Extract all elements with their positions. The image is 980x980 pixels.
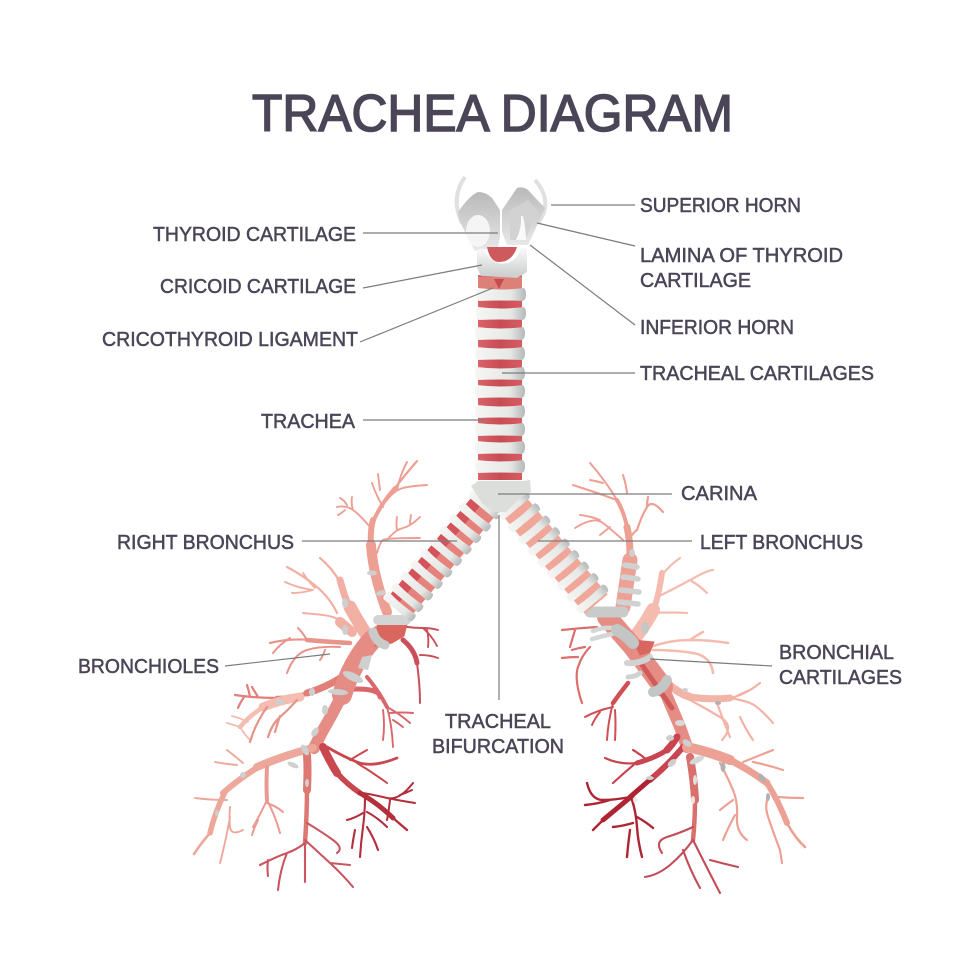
label: bronchial cartilages: CARTILAGES — [779, 667, 902, 689]
label: superior horn: SUPERIOR HORN — [640, 195, 801, 217]
left thyroid lamina — [458, 192, 500, 251]
carina — [471, 480, 531, 512]
main trunk — [607, 617, 687, 747]
label: lamina of thyroid cartilage: CARTILAGE — [640, 270, 751, 292]
label: trachea: TRACHEA — [261, 411, 356, 433]
lower-right dark branch — [323, 747, 397, 793]
label: carina: CARINA — [681, 483, 758, 505]
lower-middle branch — [305, 755, 308, 843]
cricoid cartilage — [477, 248, 527, 278]
small branches off the junction — [403, 627, 438, 703]
cartilage nodes — [629, 549, 770, 804]
larynx — [457, 177, 545, 278]
right lung bronchial tree — [562, 463, 805, 893]
label: lamina of thyroid cartilage — [640, 245, 843, 292]
label: inferior horn: INFERIOR HORN — [640, 317, 794, 339]
label: tracheal bifurcation — [432, 711, 564, 758]
middle-left branches — [235, 677, 342, 708]
label: left bronchus: LEFT BRONCHUS — [700, 532, 863, 554]
main trunk — [314, 628, 392, 748]
cricothyroid ligament — [478, 277, 522, 292]
upper branches — [573, 463, 663, 555]
upper branches — [337, 461, 427, 612]
tracheal cartilage rings — [476, 288, 526, 301]
upper-left branches — [285, 558, 370, 640]
label: bronchioles: BRONCHIOLES — [78, 656, 219, 678]
label: tracheal bifurcation: BIFURCATION — [432, 736, 564, 758]
junction fill — [375, 620, 408, 646]
label: right bronchus: RIGHT BRONCHUS — [117, 532, 294, 554]
trachea tube — [475, 275, 526, 480]
label: cricothyroid ligament: CRICOTHYROID LIGAMENT — [102, 329, 358, 351]
lower-middle branch — [690, 757, 695, 840]
label: lamina of thyroid cartilage: LAMINA OF THYROID — [640, 245, 843, 267]
left bronchus (viewer's right) — [493, 486, 611, 616]
label: tracheal cartilages: TRACHEAL CARTILAGES — [640, 363, 874, 385]
label: bronchial cartilages: BRONCHIAL — [779, 642, 894, 664]
cartilage nodes — [215, 570, 386, 816]
label: thyroid cartilage: THYROID CARTILAGE — [153, 224, 356, 246]
lower-left branch — [194, 748, 313, 863]
label: cricoid cartilage: CRICOID CARTILAGE — [160, 276, 356, 298]
leader lines — [225, 205, 772, 700]
label: bronchial cartilages — [779, 642, 902, 689]
lower dark branches — [605, 737, 683, 783]
thyroid opening — [487, 247, 517, 262]
right thyroid lamina — [502, 187, 545, 245]
small upper bronchus — [623, 560, 630, 607]
left lung bronchial tree — [194, 461, 438, 890]
label: tracheal bifurcation: TRACHEAL — [445, 711, 551, 733]
lower-right branch — [687, 747, 805, 863]
middle-right light branches — [667, 683, 773, 740]
upper-right light branches — [633, 558, 728, 673]
superior horns — [457, 177, 465, 223]
left small branches — [562, 627, 597, 703]
right bronchus (viewer's left) — [382, 486, 505, 622]
title: TRACHEA DIAGRAM — [252, 85, 733, 143]
